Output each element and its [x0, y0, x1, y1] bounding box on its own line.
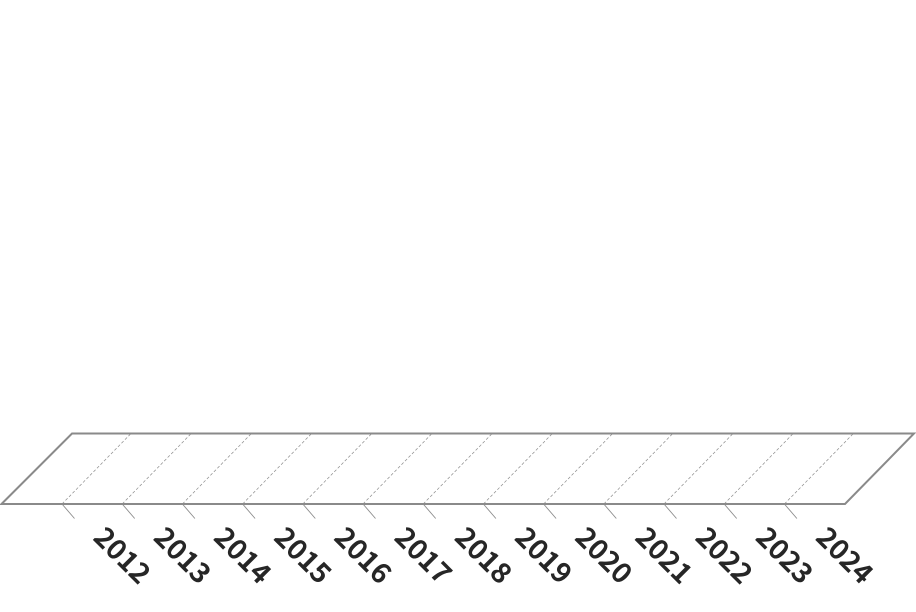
timeline plane outline	[2, 434, 914, 504]
year labels: 2019	[507, 517, 582, 592]
year labels: 2023	[748, 517, 823, 592]
year labels: 2012	[86, 517, 161, 592]
year labels: 2013	[146, 517, 221, 592]
year labels	[86, 517, 883, 592]
year labels: 2022	[688, 517, 763, 592]
dashed year guide lines	[62, 434, 853, 504]
year labels: 2017	[387, 517, 462, 592]
year labels: 2016	[326, 517, 401, 592]
year labels: 2020	[567, 517, 642, 592]
year labels: 2015	[266, 517, 341, 592]
year labels: 2021	[627, 517, 702, 592]
year labels: 2018	[447, 517, 522, 592]
year labels: 2014	[206, 517, 281, 592]
year labels: 2024	[808, 517, 883, 592]
year tick marks	[62, 504, 797, 518]
